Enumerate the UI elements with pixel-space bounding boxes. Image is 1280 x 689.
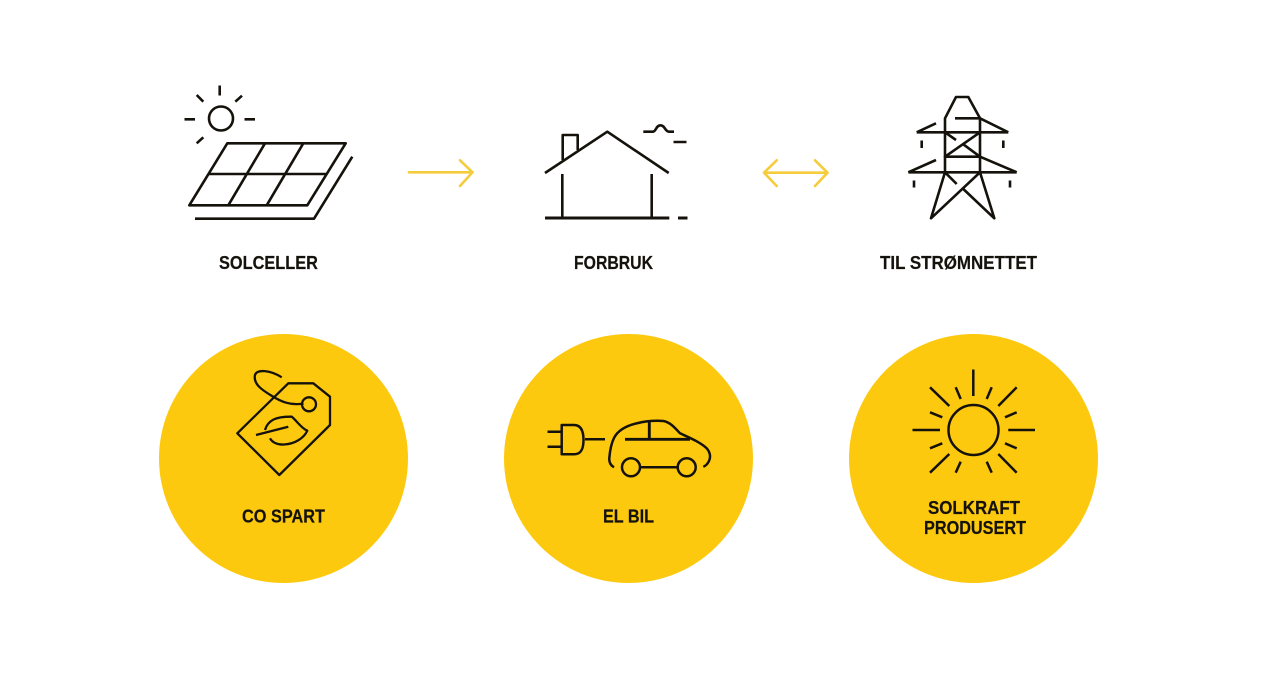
label: forbruk: FORBRUK	[574, 253, 653, 273]
arrow: two-way consumption and grid	[764, 160, 828, 186]
icon: solar panel with sun	[184, 86, 352, 219]
icon: price tag with leaf	[237, 371, 330, 475]
panel: co spart circle	[159, 334, 408, 583]
arrow: solar to consumption	[409, 160, 472, 186]
icon: plug and electric car	[548, 421, 710, 476]
icon: house	[545, 125, 688, 218]
label: solkraft produsert	[924, 498, 1026, 538]
label: solkraft produsert: PRODUSERT	[924, 518, 1026, 538]
panel: solkraft produsert circle	[849, 334, 1098, 583]
label: co spart: CO SPART	[242, 506, 325, 526]
icon: sun	[912, 370, 1035, 473]
label: solceller: SOLCELLER	[219, 253, 318, 273]
label: solkraft produsert: SOLKRAFT	[928, 498, 1020, 518]
label: el bil: EL BIL	[603, 506, 654, 526]
icon: power pylon	[908, 97, 1017, 218]
label: til stromnettet: TIL STRØMNETTET	[880, 253, 1037, 273]
panel: el bil circle	[504, 334, 753, 583]
